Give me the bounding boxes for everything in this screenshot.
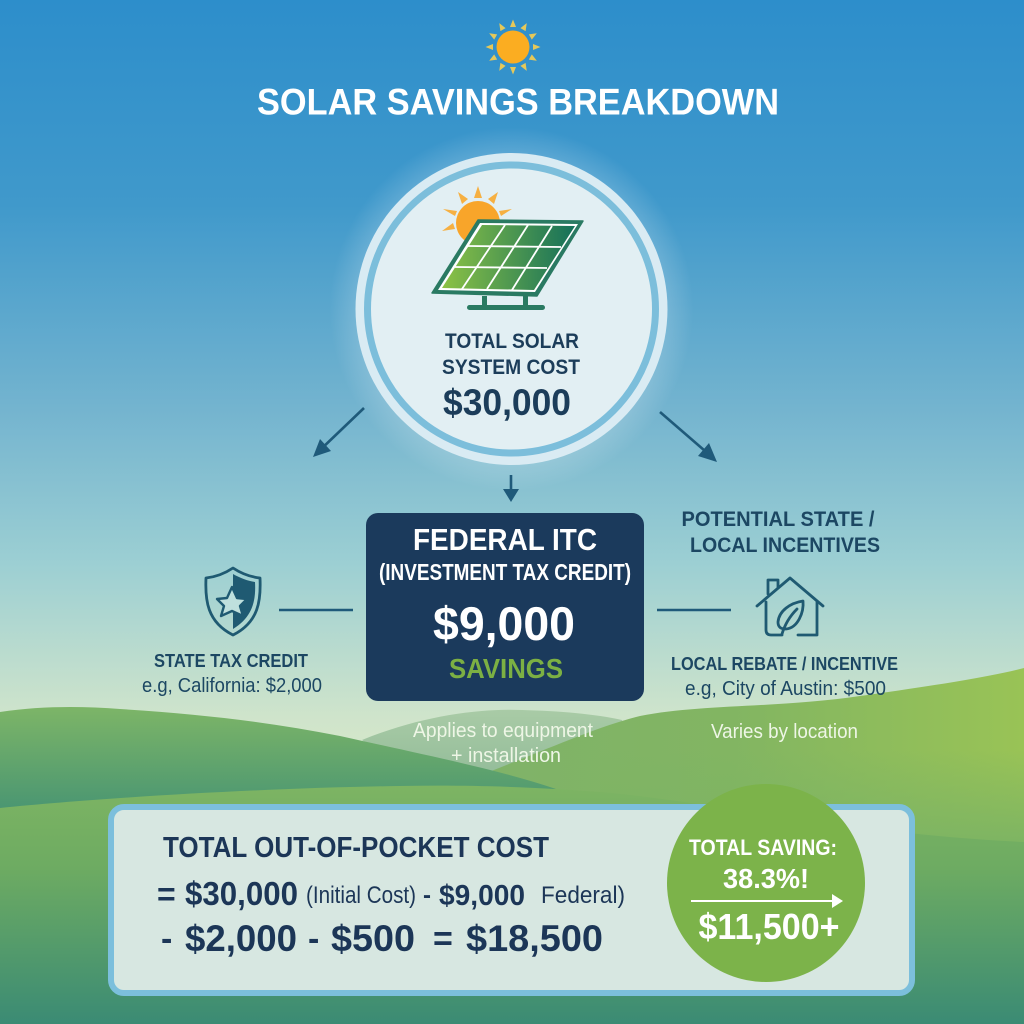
equation line 1: - — [423, 882, 431, 909]
circle: total system cost: SYSTEM COST — [442, 356, 580, 379]
title: SOLAR SAVINGS BREAKDOWN — [257, 82, 779, 122]
label: savings: SAVINGS — [449, 653, 563, 684]
icon: top sun — [486, 20, 540, 74]
text: local rebate — [671, 653, 898, 700]
label: total solar system cost: TOTAL SOLAR — [445, 330, 579, 353]
text: state tax credit: STATE TAX CREDIT — [154, 650, 309, 671]
badge: total saving: 38.3%! — [723, 863, 809, 894]
text: state tax credit: e.g, California: $2,000 — [142, 675, 322, 697]
arrow: to local incentives — [660, 412, 717, 462]
value: total cost: $30,000 — [443, 382, 571, 423]
circle: total system cost — [330, 127, 694, 491]
equation line 2: $2,000 — [185, 918, 297, 959]
heading: potential incentives: POTENTIAL STATE / — [682, 508, 875, 531]
value: federal savings: $9,000 — [433, 597, 575, 650]
text: state tax credit — [142, 650, 322, 697]
badge: total saving: TOTAL SAVING: — [689, 835, 837, 860]
note: federal scope — [413, 719, 593, 767]
heading: federal ITC: FEDERAL ITC — [413, 522, 597, 557]
text: local rebate: LOCAL REBATE / INCENTIVE — [671, 653, 898, 674]
note: varies by location: Varies by location — [711, 720, 858, 743]
connector: right — [657, 609, 731, 611]
arrow: to state tax credit — [313, 408, 364, 457]
note: federal scope: Applies to equipment — [413, 719, 593, 742]
heading: potential incentives — [682, 508, 880, 557]
arrow: to federal ITC — [503, 475, 519, 502]
equation line 1: $30,000 — [185, 875, 298, 912]
equation line 2: = — [433, 920, 453, 958]
icon: shield with star — [206, 568, 260, 635]
heading: total out-of-pocket cost: TOTAL OUT-OF-POCKET COST — [163, 832, 549, 864]
panel: federal ITC — [366, 513, 644, 701]
text: local rebate: e.g, City of Austin: $500 — [685, 678, 886, 700]
connector: left — [279, 609, 353, 611]
equation line 1 — [157, 875, 625, 912]
equation line 2: $18,500 — [466, 918, 603, 959]
background hills — [0, 668, 1024, 1024]
arrow: saving — [691, 894, 843, 908]
badge: total saving: $11,500+ — [698, 906, 840, 947]
panel: total out-of-pocket — [111, 807, 912, 993]
subheading: investment tax credit: (INVESTMENT TAX CREDIT) — [379, 559, 631, 585]
equation line 2: - — [308, 920, 319, 958]
equation line 2 — [161, 918, 603, 959]
note: federal scope: + installation — [451, 744, 561, 767]
equation line 1: $9,000 — [439, 880, 525, 912]
equation line 2: $500 — [331, 918, 415, 959]
equation line 1: = — [157, 876, 176, 912]
icon: house with leaf — [757, 578, 823, 635]
icon: solar panel with sun — [432, 186, 583, 310]
equation line 2: - — [161, 920, 172, 958]
heading: potential incentives: LOCAL INCENTIVES — [690, 534, 880, 557]
equation line 1: Federal) — [541, 882, 625, 909]
badge: total saving — [667, 784, 865, 982]
equation line 1: (Initial Cost) — [306, 882, 416, 909]
